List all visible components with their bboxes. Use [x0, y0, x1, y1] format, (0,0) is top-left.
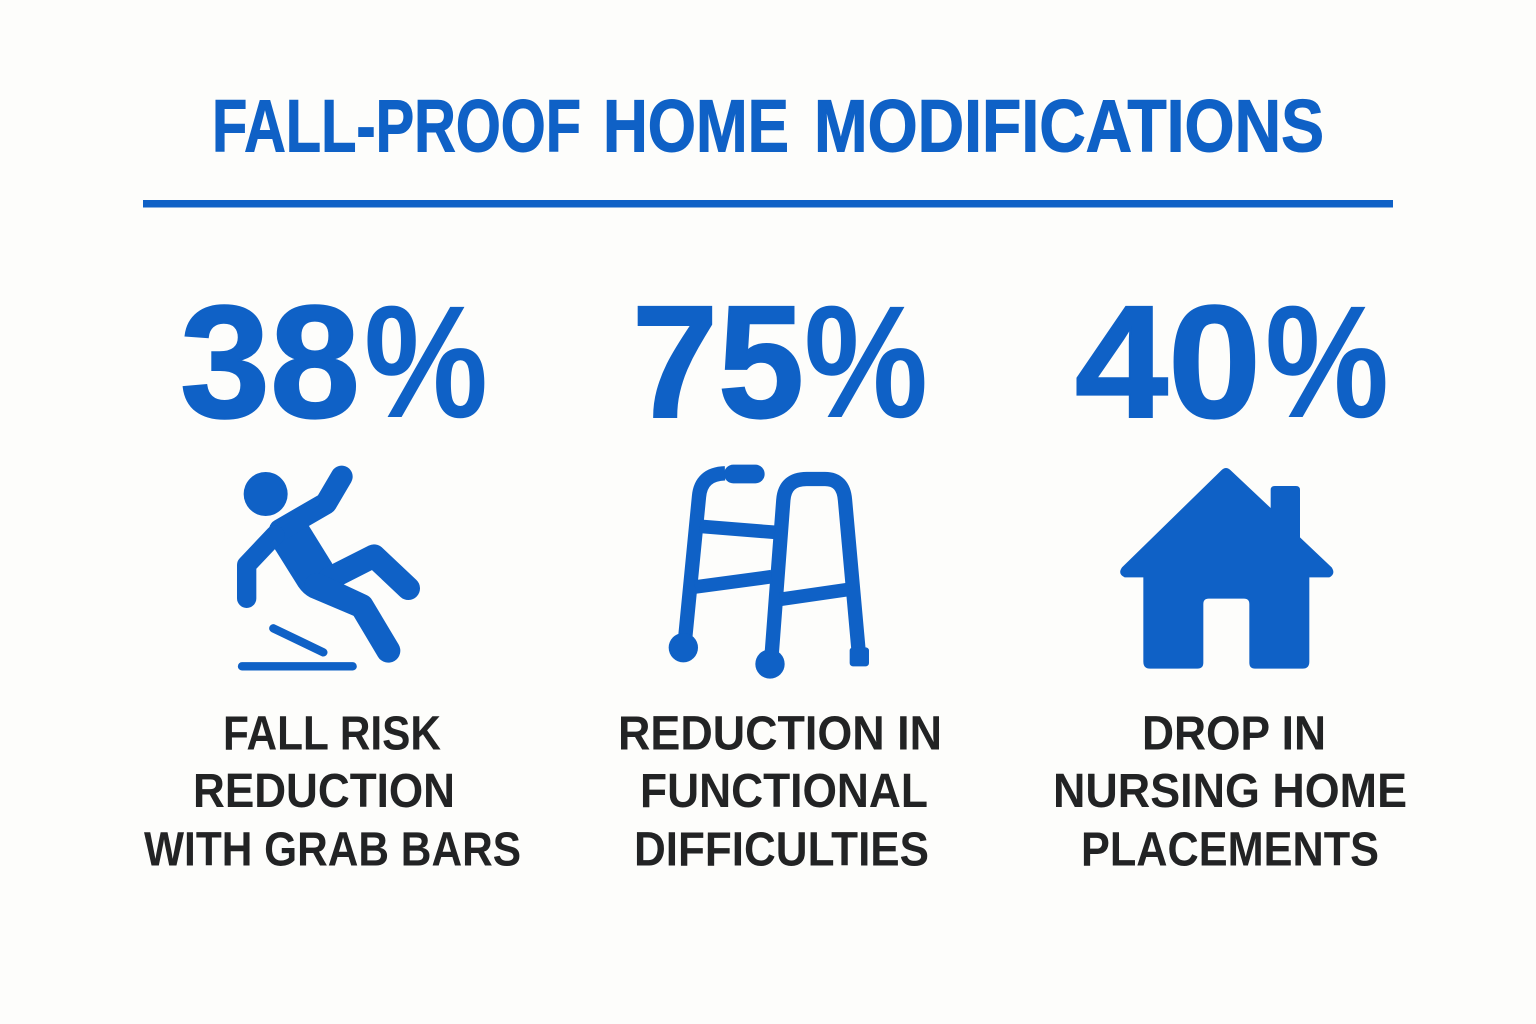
label: reduction in functional difficulties: FUNCTIONAL — [640, 765, 928, 818]
statistic: 38% — [180, 272, 488, 451]
icon: walker — [669, 473, 869, 679]
statistic: 40%: % — [1265, 272, 1389, 451]
title: HOME — [603, 84, 789, 168]
title: FALL-PROOF — [212, 84, 581, 168]
title: MODIFICATIONS — [814, 84, 1324, 168]
statistic: 75% — [632, 272, 928, 451]
statistic: 38%: 38 — [180, 272, 360, 451]
panel: functional difficulties — [618, 272, 942, 876]
statistic: 75%: 75 — [632, 272, 804, 451]
label: drop in nursing home placements: NURSING HOME — [1053, 765, 1407, 818]
title — [212, 84, 1324, 168]
label: fall risk reduction with grab bars: WITH GRAB BARS — [144, 824, 521, 876]
label: fall risk reduction with grab bars — [144, 708, 521, 876]
label: drop in nursing home placements: PLACEMENTS — [1081, 824, 1379, 876]
statistic: 40%: 40 — [1075, 272, 1261, 451]
label: fall risk reduction with grab bars: FALL RISK — [223, 708, 441, 760]
label: reduction in functional difficulties — [618, 708, 942, 876]
statistic: 40% — [1075, 272, 1389, 451]
label: drop in nursing home placements: DROP IN — [1142, 708, 1326, 760]
label: fall risk reduction with grab bars: REDUCTION — [193, 765, 455, 818]
panel: fall risk — [144, 272, 521, 876]
panel: nursing home placements — [1053, 272, 1407, 876]
label: reduction in functional difficulties: DIFFICULTIES — [634, 824, 929, 876]
label: reduction in functional difficulties: REDUCTION IN — [618, 708, 942, 760]
statistic: 38%: % — [364, 272, 488, 451]
label: drop in nursing home placements — [1053, 708, 1407, 876]
icon: house — [1120, 468, 1333, 669]
icon: falling person — [242, 472, 408, 666]
statistic: 75%: % — [804, 272, 928, 451]
